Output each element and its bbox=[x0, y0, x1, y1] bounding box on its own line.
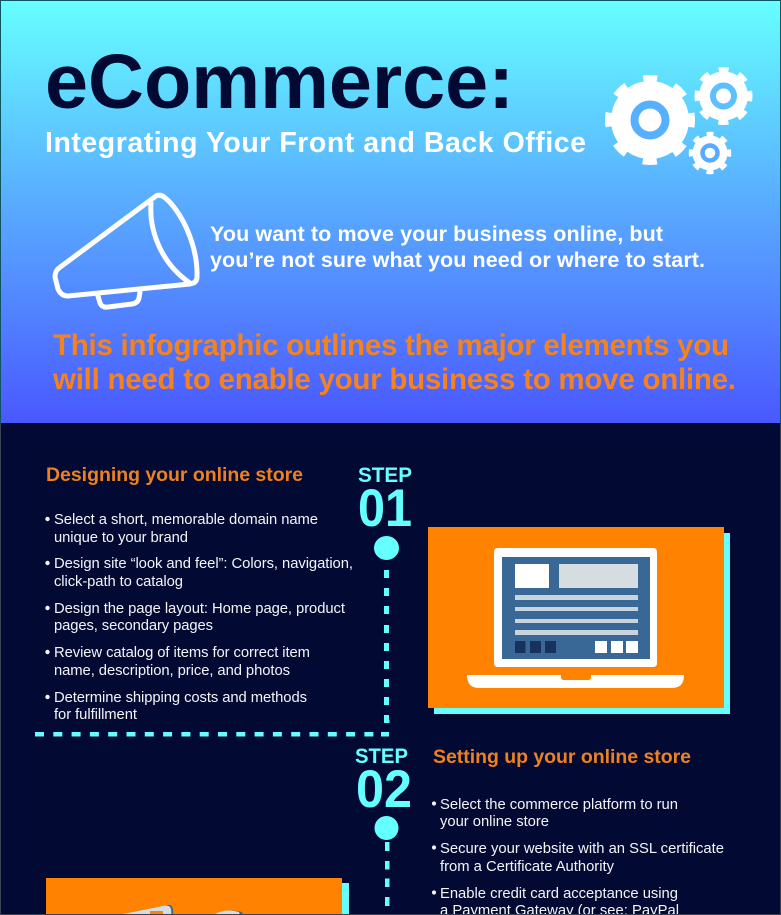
bullet list 01: pages, secondary pages bbox=[54, 618, 213, 634]
step label 02: STEP bbox=[355, 745, 408, 768]
icon: large gear bbox=[609, 79, 691, 161]
bullet list 02: your online store bbox=[440, 814, 549, 830]
bullet list 01: Review catalog of items for correct item bbox=[54, 645, 310, 661]
intro text: you’re not sure what you need or where to start. bbox=[210, 248, 705, 272]
icon: laptop bbox=[467, 548, 684, 688]
bullet list 02: Secure your website with an SSL certificate bbox=[440, 841, 724, 857]
icon: small gear bbox=[691, 134, 729, 172]
timeline node 02 bbox=[374, 816, 398, 840]
bullet list 01: name, description, price, and photos bbox=[54, 663, 290, 679]
bullet list 01: for fulfillment bbox=[54, 707, 137, 723]
orange statement: will need to enable your business to move online. bbox=[52, 363, 736, 396]
panel: step 01 bbox=[45, 464, 730, 723]
orange statement bbox=[52, 329, 736, 396]
panel: step 02 bbox=[46, 720, 724, 915]
subtitle: Integrating Your Front and Back Office bbox=[45, 127, 586, 159]
title: eCommerce: bbox=[45, 39, 514, 125]
connector: horizontal dashes bbox=[35, 732, 389, 736]
step label 02: 02 bbox=[356, 760, 412, 819]
bullet list 01: click-path to catalog bbox=[54, 574, 183, 590]
intro text bbox=[210, 222, 705, 272]
connector: vertical dashes 01 bbox=[384, 570, 389, 723]
bullet list 02: from a Certificate Authority bbox=[440, 859, 615, 875]
icon: megaphone bbox=[55, 195, 197, 307]
intro text: You want to move your business online, but bbox=[210, 222, 663, 246]
step label 01: STEP bbox=[358, 464, 412, 487]
orange statement: This infographic outlines the major elements you bbox=[53, 329, 729, 362]
heading: setting up: Setting up your online store bbox=[433, 746, 691, 768]
connector: vertical dashes 02 bbox=[385, 720, 390, 906]
icon: medium gear bbox=[698, 70, 750, 122]
icon: gears bbox=[609, 70, 750, 172]
bullet list 01: Design the page layout: Home page, product bbox=[54, 601, 345, 617]
heading: designing: Designing your online store bbox=[46, 464, 303, 486]
bullet list 02: Enable credit card acceptance using bbox=[440, 886, 678, 902]
bullet list 02: Select the commerce platform to run bbox=[440, 797, 678, 813]
panel: header bbox=[0, 0, 781, 423]
step label 01: 01 bbox=[358, 479, 412, 538]
page edge bbox=[0, 423, 780, 914]
card: step 02 illustration bbox=[46, 878, 349, 915]
timeline node 01 bbox=[374, 536, 399, 560]
bullet list 01: unique to your brand bbox=[54, 530, 188, 546]
bullet list 01: Determine shipping costs and methods bbox=[54, 690, 307, 706]
card: laptop bbox=[428, 527, 730, 714]
bullet list 01 bbox=[45, 512, 353, 723]
bullet list 01: Select a short, memorable domain name bbox=[54, 512, 318, 528]
bullet list 01: Design site “look and feel”: Colors, navigation, bbox=[54, 556, 353, 572]
bullet list 02 bbox=[432, 797, 724, 915]
